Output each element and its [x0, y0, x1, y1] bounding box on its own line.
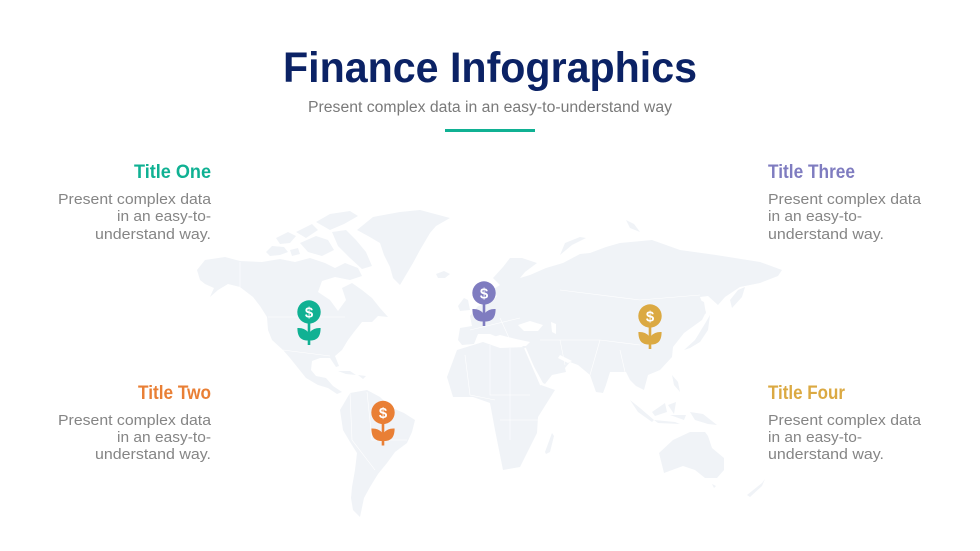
text block: Title Three: understand way.	[768, 226, 884, 243]
text block: Title Three	[768, 191, 922, 243]
text block: Title Two: Present complex data	[58, 412, 212, 429]
panel: Title Two	[58, 383, 212, 463]
icon: purple money plant pin	[472, 281, 496, 326]
heading: Title Four: Title Four	[768, 383, 846, 404]
text block: Title Two: understand way.	[95, 446, 211, 463]
text block: Title One: understand way.	[95, 226, 211, 243]
map: Kamchatka and Sakhalin	[700, 287, 745, 314]
map: Caribbean islands	[338, 371, 366, 379]
map: Indonesia and Philippines	[630, 375, 717, 425]
map: South America	[340, 390, 415, 517]
map: Greenland	[357, 210, 450, 285]
map: Iceland	[436, 271, 450, 278]
icon: orange money plant pin	[371, 401, 395, 446]
text block: Title Two	[58, 412, 212, 463]
icon: purple money plant pin: $	[480, 286, 489, 302]
map: New Zealand	[712, 479, 765, 497]
map: Eurasia	[458, 240, 782, 393]
heading: Title Two: Title Two	[138, 383, 211, 404]
icon: gold money plant pin: $	[646, 308, 655, 326]
text block: Title Three: Present complex data	[768, 191, 922, 208]
map: inland seas and country borders	[240, 262, 700, 470]
map: Arctic islands	[266, 211, 372, 274]
map: Australia	[659, 432, 724, 478]
map: Japan	[684, 315, 710, 350]
map: North America	[197, 257, 388, 394]
world map	[197, 210, 782, 517]
panel: Title Three	[768, 162, 922, 243]
text block: Title One: Present complex data	[58, 191, 212, 208]
map: Novaya Zemlya and Arctic Russia	[560, 220, 640, 255]
panel: Title Four	[768, 383, 922, 463]
panel: Title One	[58, 162, 212, 243]
text block: Title Three: in an easy-to-	[768, 208, 862, 225]
text block: Title Four	[768, 412, 922, 463]
title: Finance Infographics	[283, 44, 697, 92]
text block: Title Four: in an easy-to-	[768, 429, 862, 446]
icon: gold money plant pin	[638, 304, 662, 349]
accent rule	[445, 129, 535, 132]
subtitle: Present complex data in an easy-to-understand way	[308, 99, 672, 116]
heading: Title One: Title One	[134, 162, 211, 183]
map: Africa	[447, 342, 555, 470]
heading: Title Three: Title Three	[768, 162, 855, 183]
text block: Title One: in an easy-to-	[117, 208, 211, 225]
text block: Title Four: Present complex data	[768, 412, 922, 429]
text block: Title One	[58, 191, 212, 243]
icon: teal money plant pin: $	[305, 304, 314, 322]
map: Madagascar	[545, 433, 554, 454]
text block: Title Two: in an easy-to-	[117, 429, 211, 446]
map: Britain	[458, 298, 470, 311]
text block: Title Four: understand way.	[768, 446, 884, 463]
icon: teal money plant pin	[297, 300, 321, 345]
icon: orange money plant pin: $	[379, 405, 388, 422]
